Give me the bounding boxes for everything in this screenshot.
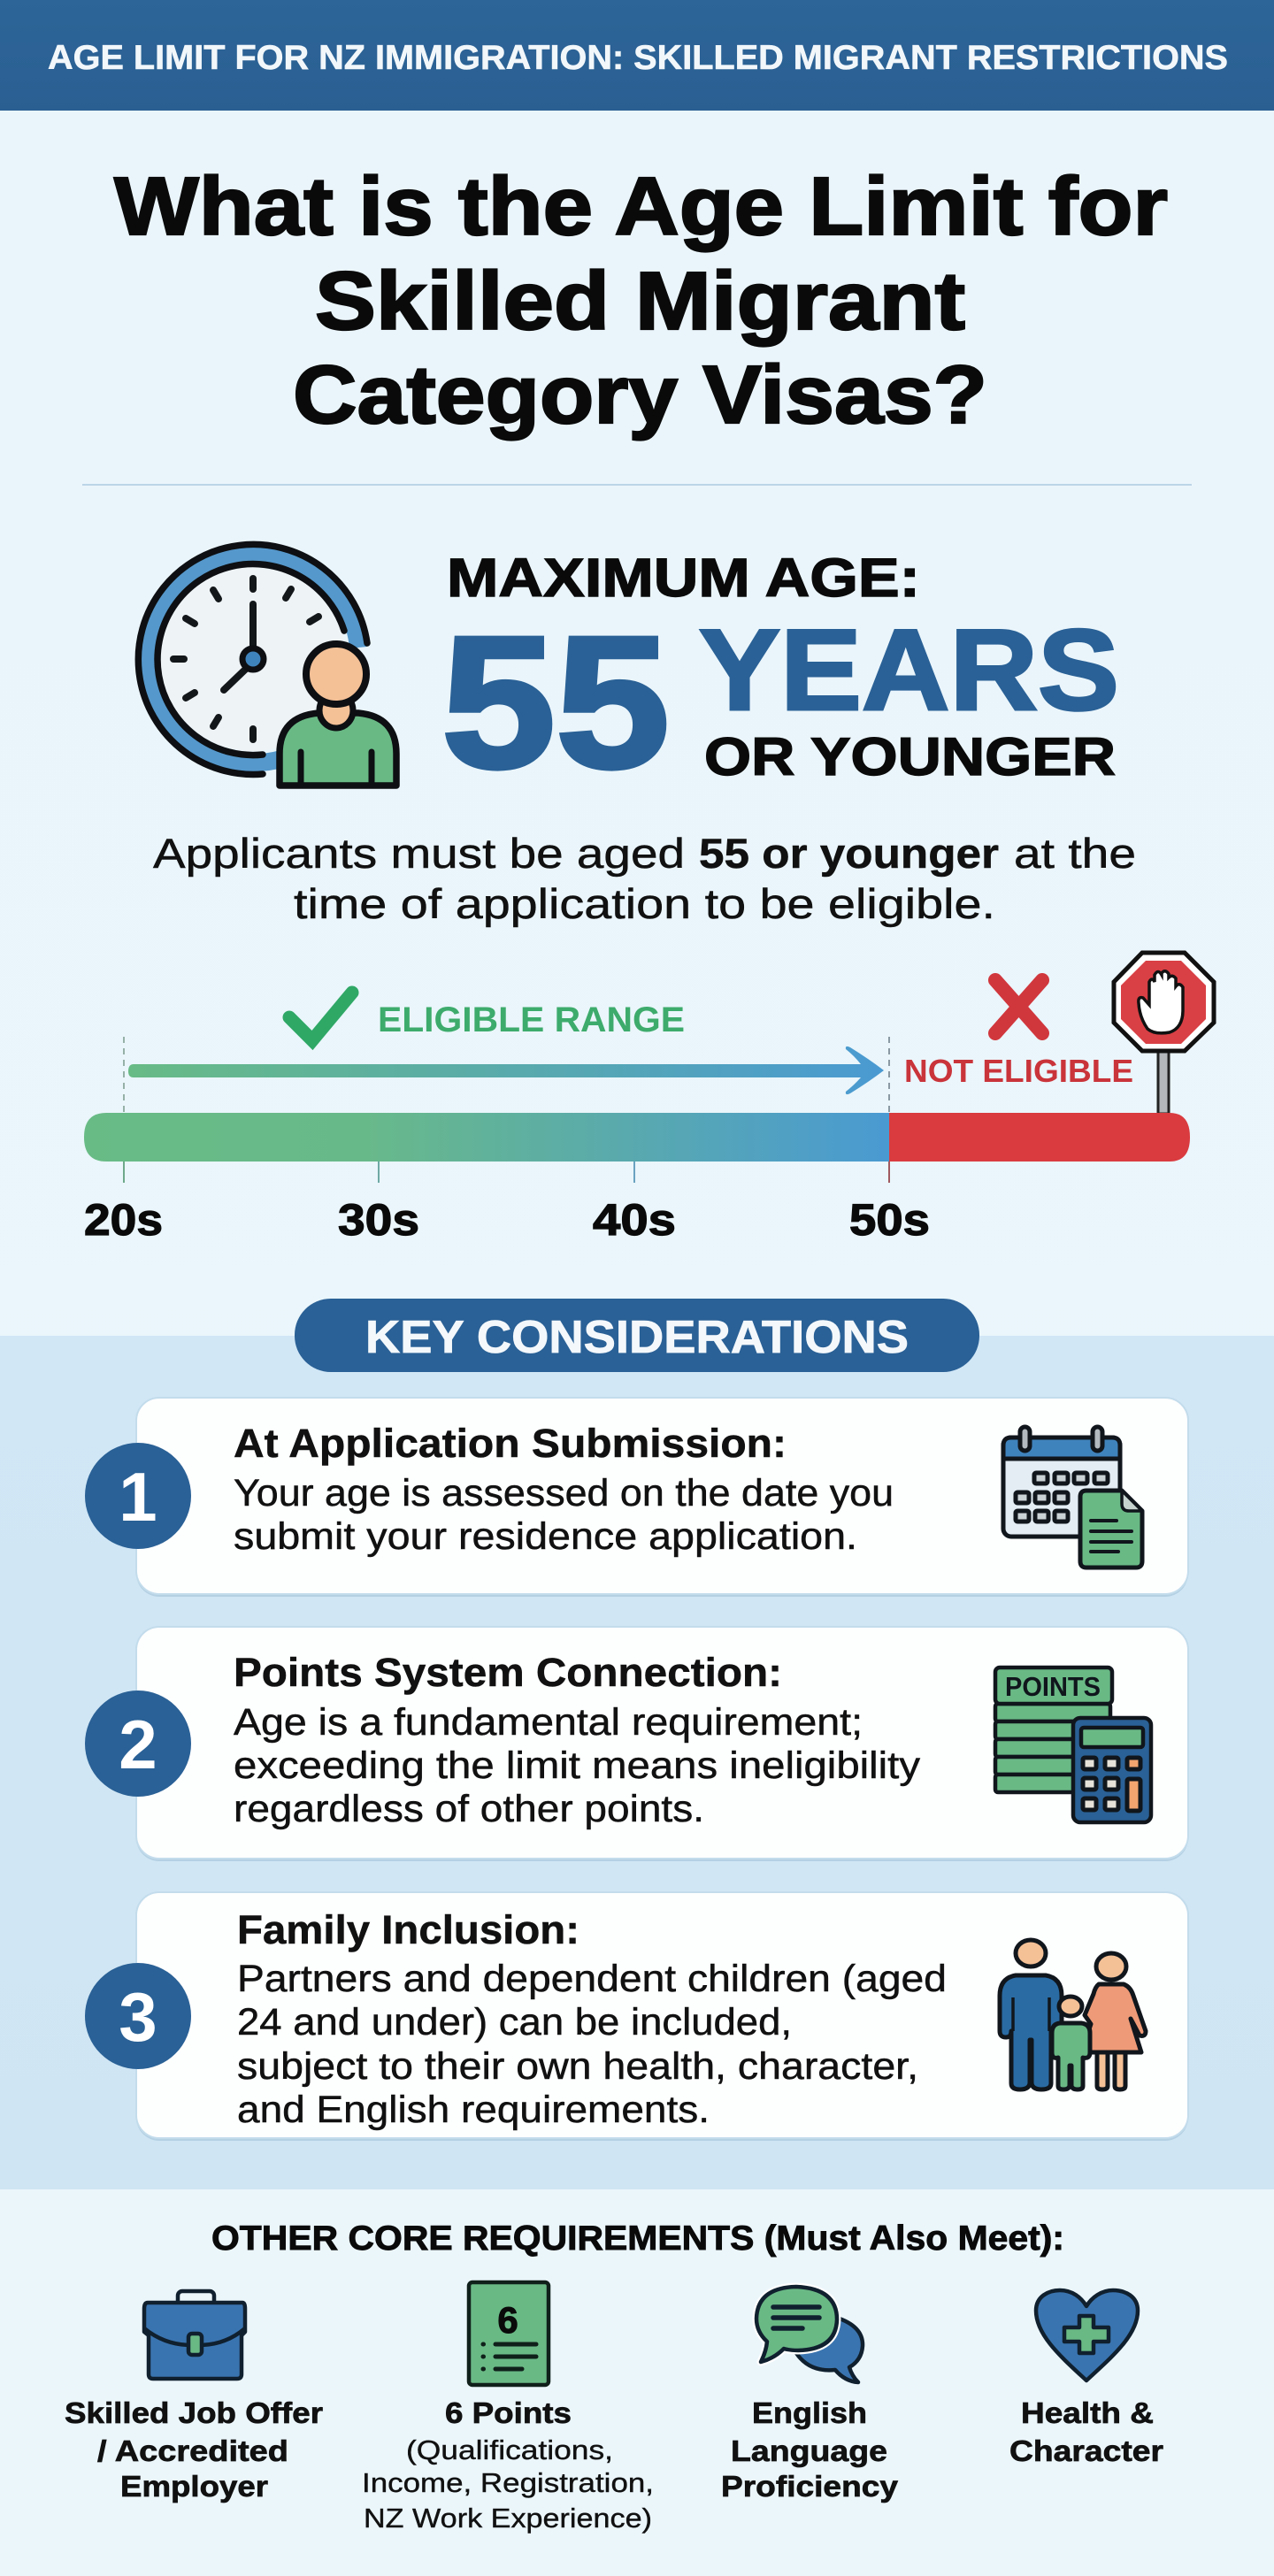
heading pill: KEY CONSIDERATIONS bbox=[365, 1312, 909, 1363]
eligibility sentence: at the bbox=[1014, 830, 1136, 877]
title: Skilled Migrant bbox=[315, 255, 965, 347]
number badge 1 bbox=[85, 1443, 191, 1549]
icon: heart with cross bbox=[1036, 2290, 1138, 2380]
requirement: english bbox=[721, 2287, 899, 2503]
health label: Health & bbox=[1021, 2396, 1154, 2429]
eligible arrow bbox=[128, 1046, 884, 1094]
6 points label bbox=[362, 2396, 654, 2534]
maximum age callout: YEARS bbox=[699, 605, 1119, 734]
eligibility sentence: 55 or younger bbox=[699, 830, 999, 877]
requirement: 6 points bbox=[362, 2282, 654, 2534]
card 2 text: Points System Connection: bbox=[234, 1650, 782, 1695]
number badge 1: 1 bbox=[119, 1458, 157, 1536]
age timeline chart bbox=[84, 953, 1214, 1245]
card 2 text: regardless of other points. bbox=[234, 1788, 704, 1830]
card 3 text: 24 and under) can be included, bbox=[237, 2001, 792, 2043]
card 1 text: submit your residence application. bbox=[234, 1515, 857, 1558]
6 points label: Income, Registration, bbox=[362, 2467, 654, 2498]
card 3 text: Partners and dependent children (aged bbox=[237, 1958, 947, 2000]
age labels: 40s bbox=[593, 1195, 676, 1245]
job offer label: Employer bbox=[120, 2470, 268, 2503]
age labels: 50s bbox=[849, 1195, 930, 1245]
other core requirements heading: OTHER CORE REQUIREMENTS (Must Also Meet): bbox=[211, 2220, 1064, 2258]
not eligible label: NOT ELIGIBLE bbox=[904, 1053, 1133, 1089]
english label: Proficiency bbox=[721, 2470, 899, 2503]
icon: green check bbox=[289, 993, 352, 1040]
health label bbox=[1009, 2396, 1163, 2467]
timeline bar bbox=[84, 1113, 889, 1162]
eligibility sentence bbox=[153, 830, 1136, 927]
maximum age callout: 55 bbox=[441, 597, 670, 807]
icon: family bbox=[1000, 1940, 1146, 2089]
card 3 text: subject to their own health, character, bbox=[237, 2045, 918, 2088]
card 1 text: At Application Submission: bbox=[234, 1421, 787, 1466]
english label: Language bbox=[731, 2434, 887, 2467]
icon: speech bubbles bbox=[756, 2287, 863, 2382]
icon: stop sign bbox=[1114, 953, 1214, 1114]
age labels: 30s bbox=[338, 1195, 419, 1245]
header banner bbox=[0, 0, 1274, 111]
icon: points document: 6 bbox=[497, 2299, 518, 2341]
health label: Character bbox=[1009, 2434, 1163, 2467]
card 2 text: exceeding the limit means ineligibility bbox=[234, 1744, 921, 1787]
title bbox=[114, 160, 1168, 441]
job offer label: Skilled Job Offer bbox=[65, 2396, 323, 2429]
job offer label bbox=[65, 2396, 323, 2503]
card 2 text: Age is a fundamental requirement; bbox=[234, 1701, 863, 1744]
icon: briefcase bbox=[144, 2291, 245, 2379]
heading pill bbox=[295, 1299, 979, 1372]
card 1 text bbox=[234, 1421, 894, 1558]
number badge 2 bbox=[85, 1690, 191, 1797]
card 3 text: Family Inclusion: bbox=[237, 1907, 579, 1952]
number badge 3: 3 bbox=[119, 1978, 157, 2056]
icon: points sheet and calculator bbox=[995, 1668, 1151, 1822]
job offer label: / Accredited bbox=[97, 2434, 288, 2467]
eligibility sentence: time of application to be eligible. bbox=[294, 880, 995, 927]
6 points label: (Qualifications, bbox=[406, 2434, 613, 2465]
icon: points sheet and calculator: POINTS bbox=[1005, 1671, 1101, 1702]
card 2 bbox=[85, 1627, 1188, 1861]
header banner: AGE LIMIT FOR NZ IMMIGRATION: SKILLED MIGRANT RESTRICTIONS bbox=[48, 39, 1228, 77]
card 3 text bbox=[237, 1907, 947, 2131]
card 1 bbox=[85, 1398, 1188, 1597]
maximum age callout bbox=[441, 548, 1119, 807]
icon: red cross bbox=[995, 980, 1042, 1033]
english label: English bbox=[752, 2396, 867, 2429]
card 3 bbox=[85, 1892, 1188, 2141]
icon: clock with person bbox=[138, 544, 396, 786]
maximum age callout: OR YOUNGER bbox=[704, 727, 1116, 786]
maximum age callout: MAXIMUM AGE: bbox=[447, 548, 920, 608]
requirement: job offer bbox=[65, 2291, 323, 2503]
6 points label: NZ Work Experience) bbox=[364, 2503, 652, 2534]
card 3 text: and English requirements. bbox=[237, 2089, 710, 2131]
icon: calendar and document bbox=[1003, 1427, 1142, 1568]
panel: key considerations bbox=[0, 1299, 1274, 2189]
eligibility sentence: Applicants must be aged bbox=[153, 830, 685, 877]
number badge 2: 2 bbox=[119, 1706, 157, 1783]
card 2 text bbox=[234, 1650, 921, 1830]
title: Category Visas? bbox=[293, 349, 987, 441]
age labels bbox=[84, 1195, 930, 1245]
card 1 text: Your age is assessed on the date you bbox=[234, 1472, 894, 1514]
requirement: health bbox=[1009, 2290, 1163, 2467]
age labels: 20s bbox=[84, 1195, 163, 1245]
title: What is the Age Limit for bbox=[114, 160, 1168, 252]
eligible range label: ELIGIBLE RANGE bbox=[378, 1000, 685, 1039]
number badge 3 bbox=[85, 1963, 191, 2069]
icon: points document bbox=[469, 2282, 549, 2385]
6 points label: 6 Points bbox=[445, 2396, 572, 2429]
english label bbox=[721, 2396, 899, 2503]
